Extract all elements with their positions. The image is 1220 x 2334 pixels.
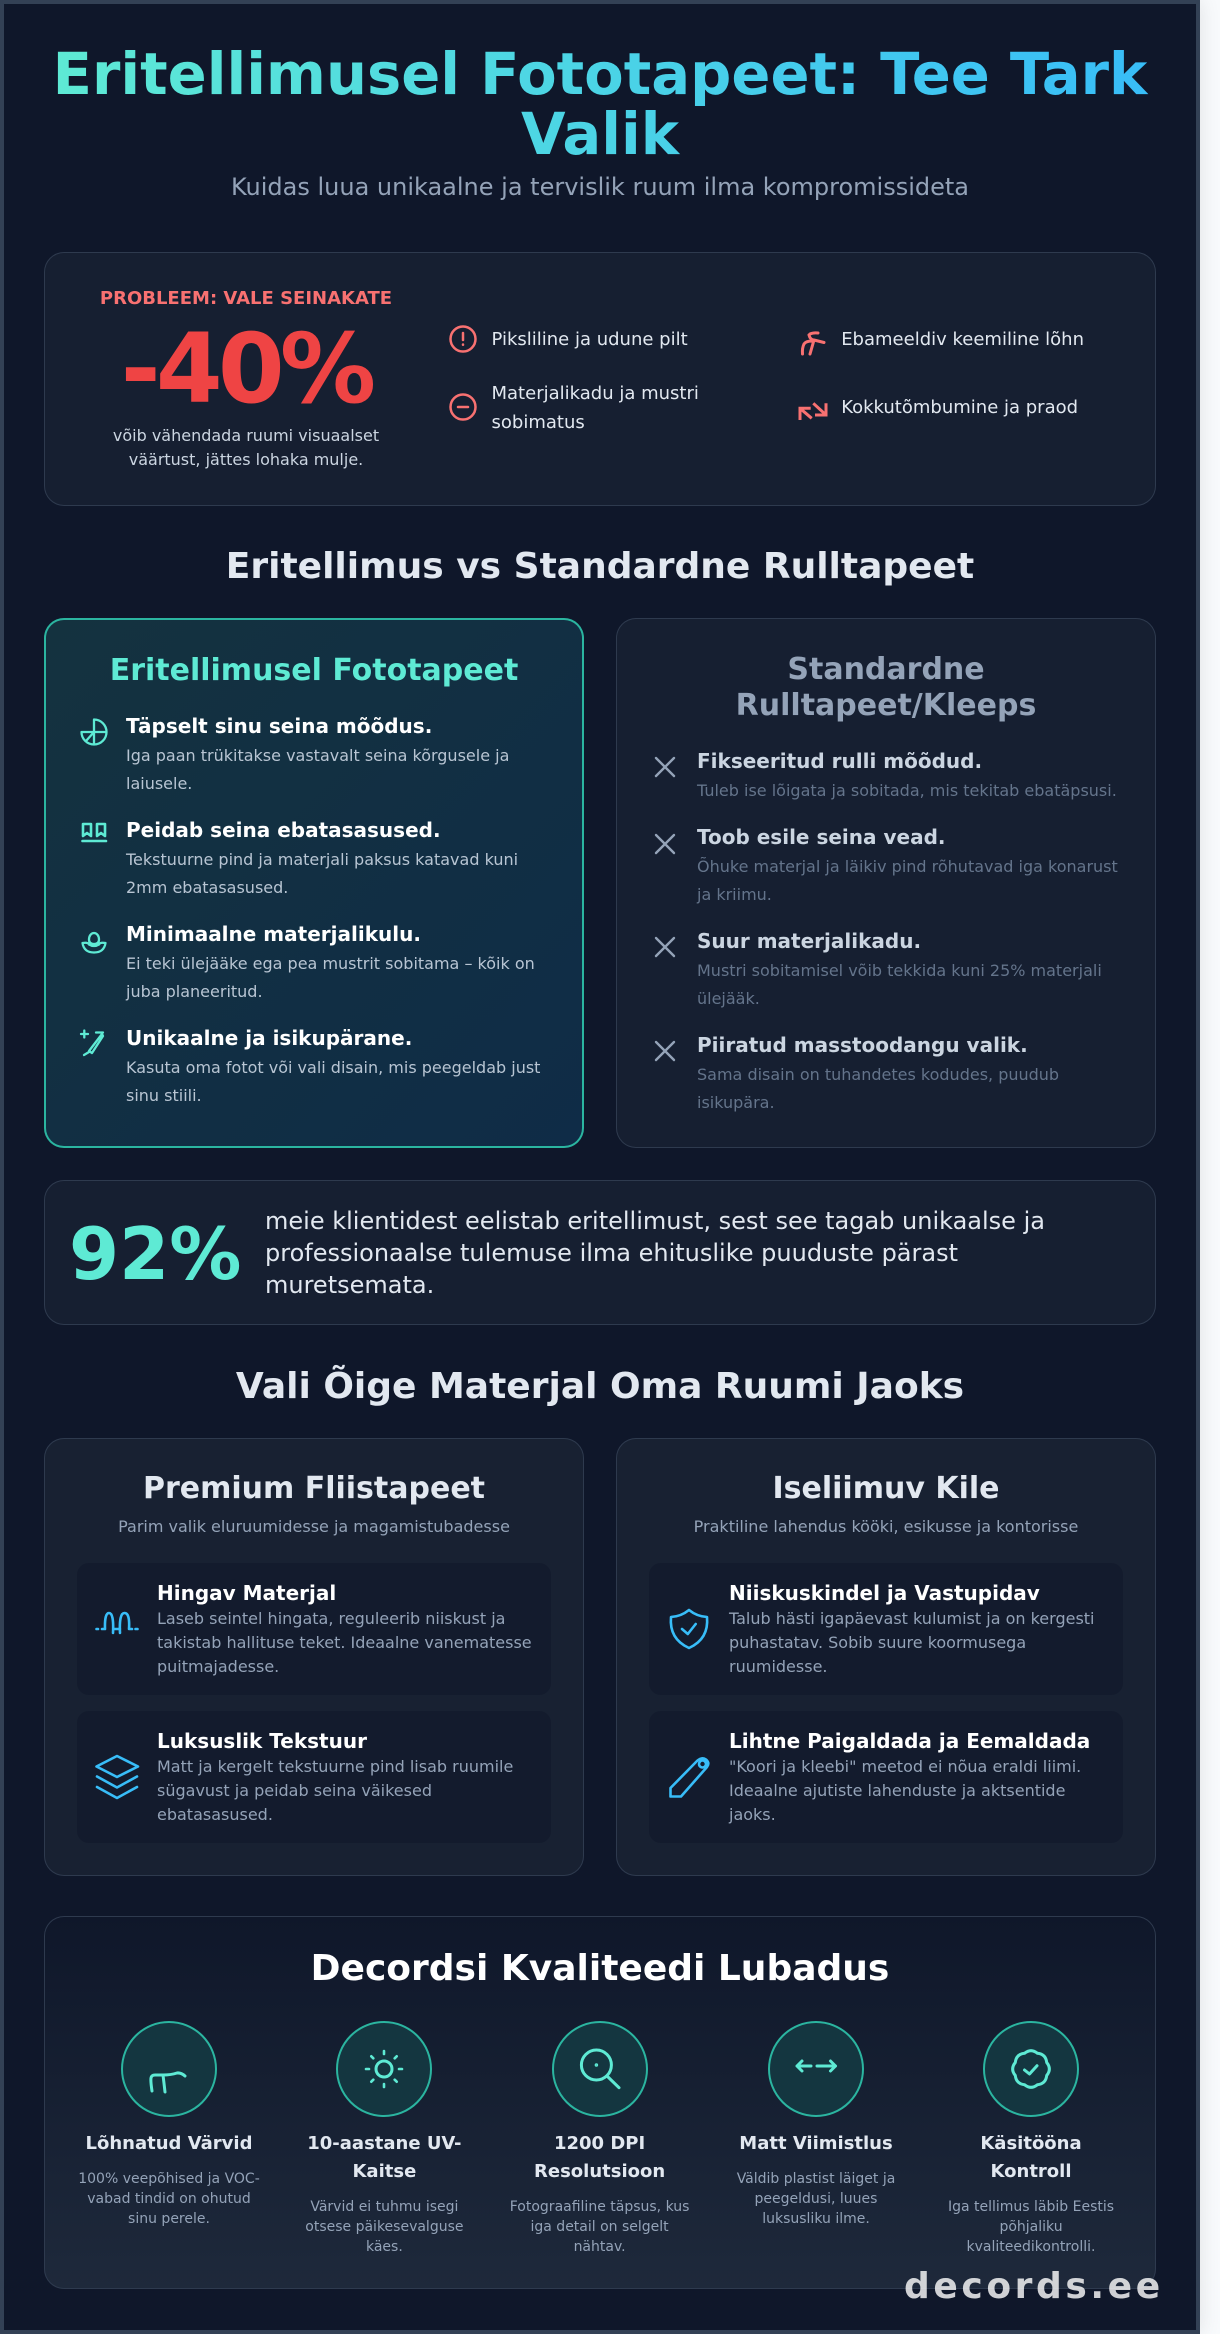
- drawback 3: [654, 929, 1102, 1008]
- benefit text: Täpselt sinu seina mõõdus.: [126, 714, 432, 738]
- drawback text: Suur materjalikadu.: [697, 929, 921, 953]
- feature text: Talub hästi igapäevast kulumist ja on kergesti: [729, 1608, 1094, 1628]
- promise: matte finish: [716, 2021, 916, 2261]
- promise text: sinu perele.: [128, 2211, 210, 2227]
- problem description: võib vähendada ruumi visuaalset: [113, 426, 379, 444]
- feature text: Ideaalne ajutiste lahenduste ja aktsentide: [729, 1780, 1065, 1800]
- promise text: otsese päikesevalguse: [305, 2219, 464, 2235]
- panel: standard roll wallpaper: [616, 618, 1156, 1148]
- stat text: professionaalse tulemuse ilma ehituslike puuduste pärast: [265, 1238, 958, 1266]
- drawback text: [696, 825, 1118, 904]
- problem label: PROBLEEM: VALE SEINAKATE: [100, 288, 392, 309]
- promise text: luksusliku ilme.: [762, 2211, 870, 2227]
- drawback text: Sama disain on tuhandetes kodudes, puudub: [697, 1065, 1059, 1084]
- feature text: Laseb seintel hingata, reguleerib niiskust ja: [157, 1608, 505, 1628]
- stat text: [265, 1206, 1045, 1298]
- benefit text: [126, 818, 518, 897]
- panel title: Decordsi Kvaliteedi Lubadus: [311, 1948, 889, 1988]
- benefit text: Unikaalne ja isikupärane.: [126, 1026, 412, 1050]
- drawback 1: [654, 749, 1117, 800]
- promise heading: [284, 2130, 484, 2186]
- panel: premium non-woven wallpaper: [44, 1438, 584, 1876]
- feature heading: Hingav Materjal: [157, 1581, 336, 1605]
- feature text: takistab hallituse teket. Ideaalne vanematesse: [157, 1632, 532, 1652]
- feature text: [728, 1756, 1081, 1824]
- benefit text: [126, 1026, 540, 1105]
- panel: custom photo wallpaper: [44, 618, 584, 1148]
- drawback text: Piiratud masstoodangu valik.: [697, 1033, 1028, 1057]
- feature text: sügavust ja peidab seina väikesed: [157, 1780, 432, 1800]
- icon: bookmarks: [81, 822, 108, 842]
- heading: materials: Vali Õige Materjal Oma Ruumi Jaoks: [236, 1366, 964, 1406]
- benefit text: Iga paan trükitakse vastavalt seina kõrgusele ja: [126, 746, 509, 765]
- benefit text: sinu stiili.: [126, 1086, 202, 1105]
- promise heading: [931, 2130, 1131, 2186]
- promise text: [69, 2169, 269, 2229]
- promise text: peegeldusi, luues: [755, 2191, 877, 2207]
- benefit 3: [81, 922, 535, 1001]
- feature text: puhastatav. Sobib suure koormusega: [729, 1632, 1026, 1652]
- promise text: Väldib plastist läiget ja: [737, 2171, 895, 2187]
- icon: unpleasant smell: [800, 331, 826, 356]
- panel: quality promise: [44, 1916, 1156, 2289]
- icon: double arrows: [768, 2021, 864, 2117]
- card subtitle: Praktiline lahendus kööki, esikusse ja kontorisse: [694, 1516, 1078, 1536]
- promise heading: Kaitse: [352, 2160, 416, 2182]
- feature text: ruumidesse.: [729, 1656, 828, 1676]
- icon: cross: [654, 936, 676, 958]
- icon: shield check: [670, 1608, 708, 1650]
- icon: magic wand: [80, 1029, 104, 1056]
- icon: magnifier: [552, 2021, 648, 2117]
- promise text: Värvid ei tuhmu isegi: [310, 2199, 458, 2215]
- stat text: muretsemata.: [265, 1270, 434, 1298]
- benefit text: Tekstuurne pind ja materjali paksus katavad kuni: [126, 850, 518, 869]
- feature heading: Lihtne Paigaldada ja Eemaldada: [729, 1729, 1090, 1753]
- panel: problem: [44, 252, 1156, 506]
- promise: resolution: [500, 2021, 700, 2261]
- benefit text: [126, 714, 509, 793]
- problem description: väärtust, jättes lohaka mulje.: [129, 450, 363, 469]
- icon: pencil: [669, 1757, 710, 1798]
- drawback text: Tuleb ise lõigata ja sobitada, mis tekitab ebatäpsusi.: [697, 781, 1117, 800]
- problem item: material waste: Materjalikadu ja mustri: [492, 383, 699, 404]
- icon: cross: [654, 756, 676, 778]
- card title: Rulltapeet/Kleeps: [736, 688, 1036, 722]
- promise: scent-free inks: [69, 2021, 269, 2261]
- promise text: käes.: [366, 2239, 403, 2255]
- problem description: [113, 426, 379, 469]
- drawback text: Mustri sobitamisel võib tekkida kuni 25% materjali: [697, 961, 1102, 980]
- watermark: decords.ee: decords.ee: [904, 2266, 1164, 2307]
- problem item: shrinkage: Kokkutõmbumine ja praod: [841, 397, 1078, 418]
- drawback text: isikupära.: [697, 1093, 775, 1112]
- title: [44, 45, 1156, 165]
- promise heading: 1200 DPI: [554, 2132, 645, 2154]
- feature text: "Koori ja kleebi" meetod ei nõua eraldi liimi.: [729, 1756, 1081, 1776]
- drawback text: Toob esile seina vead.: [697, 825, 946, 849]
- feature: easy install: [649, 1711, 1123, 1843]
- drawback text: Fikseeritud rulli mõõdud.: [697, 749, 982, 773]
- promise text: kvaliteedikontrolli.: [967, 2239, 1095, 2255]
- card title: Eritellimusel Fototapeet: [110, 652, 518, 688]
- benefit text: [126, 922, 535, 1001]
- icon: breathing wall: [95, 1612, 139, 1634]
- drawback 2: [654, 825, 1118, 904]
- promise text: [284, 2197, 484, 2257]
- benefit text: laiusele.: [126, 774, 192, 793]
- benefit text: 2mm ebatasasused.: [126, 878, 288, 897]
- benefit 2: [81, 818, 518, 897]
- promise text: [500, 2197, 700, 2257]
- promise text: põhjaliku: [999, 2219, 1063, 2235]
- promise text: iga detail on selgelt: [530, 2219, 669, 2235]
- card title: Premium Fliistapeet: [143, 1471, 485, 1506]
- drawback text: [697, 929, 1102, 1008]
- feature heading: Luksuslik Tekstuur: [157, 1729, 367, 1753]
- icon: bowl: [81, 932, 107, 954]
- promise heading: [500, 2130, 700, 2186]
- icon: cross: [654, 834, 676, 854]
- feature heading: Niiskuskindel ja Vastupidav: [729, 1581, 1040, 1605]
- icon: compress arrows: [798, 402, 828, 420]
- drawback text: ja kriimu.: [697, 885, 772, 904]
- card subtitle: Parim valik eluruumidesse ja magamistubadesse: [118, 1516, 510, 1536]
- problem item: material waste: [492, 383, 699, 433]
- promise heading: Matt Viimistlus: [739, 2132, 893, 2154]
- problem item: blurry image: Piksliline ja udune pilt: [492, 329, 688, 350]
- icon: layers: [95, 1754, 140, 1800]
- benefit text: Ei teki ülejääke ega pea mustrit sobitama – kõik on: [126, 954, 535, 973]
- icon: badge check: [983, 2021, 1079, 2117]
- benefit 1: [80, 714, 509, 793]
- big stat -40%: -40%: [121, 313, 371, 425]
- promise heading: Käsitööna: [980, 2132, 1082, 2154]
- promise text: vabad tindid on ohutud: [87, 2191, 251, 2207]
- promise text: Iga tellimus läbib Eestis: [948, 2199, 1114, 2215]
- icon: faded colours: [121, 2021, 217, 2117]
- drawback text: Õhuke materjal ja läikiv pind rõhutavad iga konarust: [697, 857, 1118, 876]
- title: Eritellimusel Fototapeet: Tee Tark: [53, 41, 1147, 108]
- drawback text: ülejääk.: [697, 989, 760, 1008]
- drawback text: [696, 749, 1117, 800]
- card title: Standardne: [787, 652, 985, 686]
- promise: UV protection: [284, 2021, 484, 2261]
- card title: [736, 652, 1036, 722]
- panel: self-adhesive film: [616, 1438, 1156, 1876]
- title: Valik: [521, 101, 679, 168]
- benefit text: Peidab seina ebatasasused.: [126, 818, 441, 842]
- feature text: [157, 1608, 532, 1676]
- panel: 92% stat: [44, 1180, 1156, 1325]
- feature: breathable: [77, 1563, 551, 1695]
- benefit text: juba planeeritud.: [126, 982, 263, 1001]
- drawback text: [697, 1033, 1059, 1112]
- promise heading: Resolutsioon: [534, 2160, 665, 2182]
- drawback 4: [654, 1033, 1059, 1112]
- stat text: meie klientidest eelistab eritellimust, sest see tagab unikaalse ja: [265, 1206, 1045, 1234]
- feature: texture: [77, 1711, 551, 1843]
- promise text: nähtav.: [574, 2239, 626, 2255]
- feature text: jaoks.: [729, 1804, 776, 1824]
- card title: Iseliimuv Kile: [772, 1471, 1000, 1506]
- promise text: [931, 2197, 1131, 2257]
- icon: pie: [80, 718, 108, 746]
- heading: comparison: Eritellimus vs Standardne Rulltapeet: [226, 546, 974, 586]
- promise text: [716, 2169, 916, 2229]
- stat number: 92%: [69, 1212, 241, 1296]
- benefit text: Kasuta oma fotot või vali disain, mis peegeldab just: [126, 1058, 540, 1077]
- feature text: ebatasasused.: [157, 1804, 273, 1824]
- icon: minus circle: [449, 393, 477, 421]
- feature: moisture resistant: [649, 1563, 1123, 1695]
- promise heading: 10-aastane UV-: [307, 2132, 462, 2154]
- promise heading: Kontroll: [990, 2160, 1072, 2182]
- subtitle: Kuidas luua unikaalne ja tervislik ruum ilma kompromissideta: [231, 173, 969, 201]
- benefit text: Minimaalne materjalikulu.: [126, 922, 421, 946]
- promise text: Fotograafiline täpsus, kus: [510, 2199, 689, 2215]
- icon: alert circle: [449, 325, 477, 353]
- icon: sun: [336, 2021, 432, 2117]
- promise text: 100% veepõhised ja VOC-: [78, 2171, 260, 2187]
- feature text: puitmajadesse.: [157, 1656, 279, 1676]
- promise heading: Lõhnatud Värvid: [86, 2132, 252, 2154]
- icon: cross: [654, 1040, 676, 1062]
- feature text: Matt ja kergelt tekstuurne pind lisab ruumile: [157, 1756, 513, 1776]
- problem item: chemical smell: Ebameeldiv keemiline lõhn: [841, 329, 1084, 350]
- feature text: [157, 1756, 513, 1824]
- promise: manual control: [931, 2021, 1131, 2261]
- benefit 4: [80, 1026, 540, 1105]
- feature text: [728, 1608, 1094, 1676]
- problem item: material waste: sobimatus: [492, 412, 585, 433]
